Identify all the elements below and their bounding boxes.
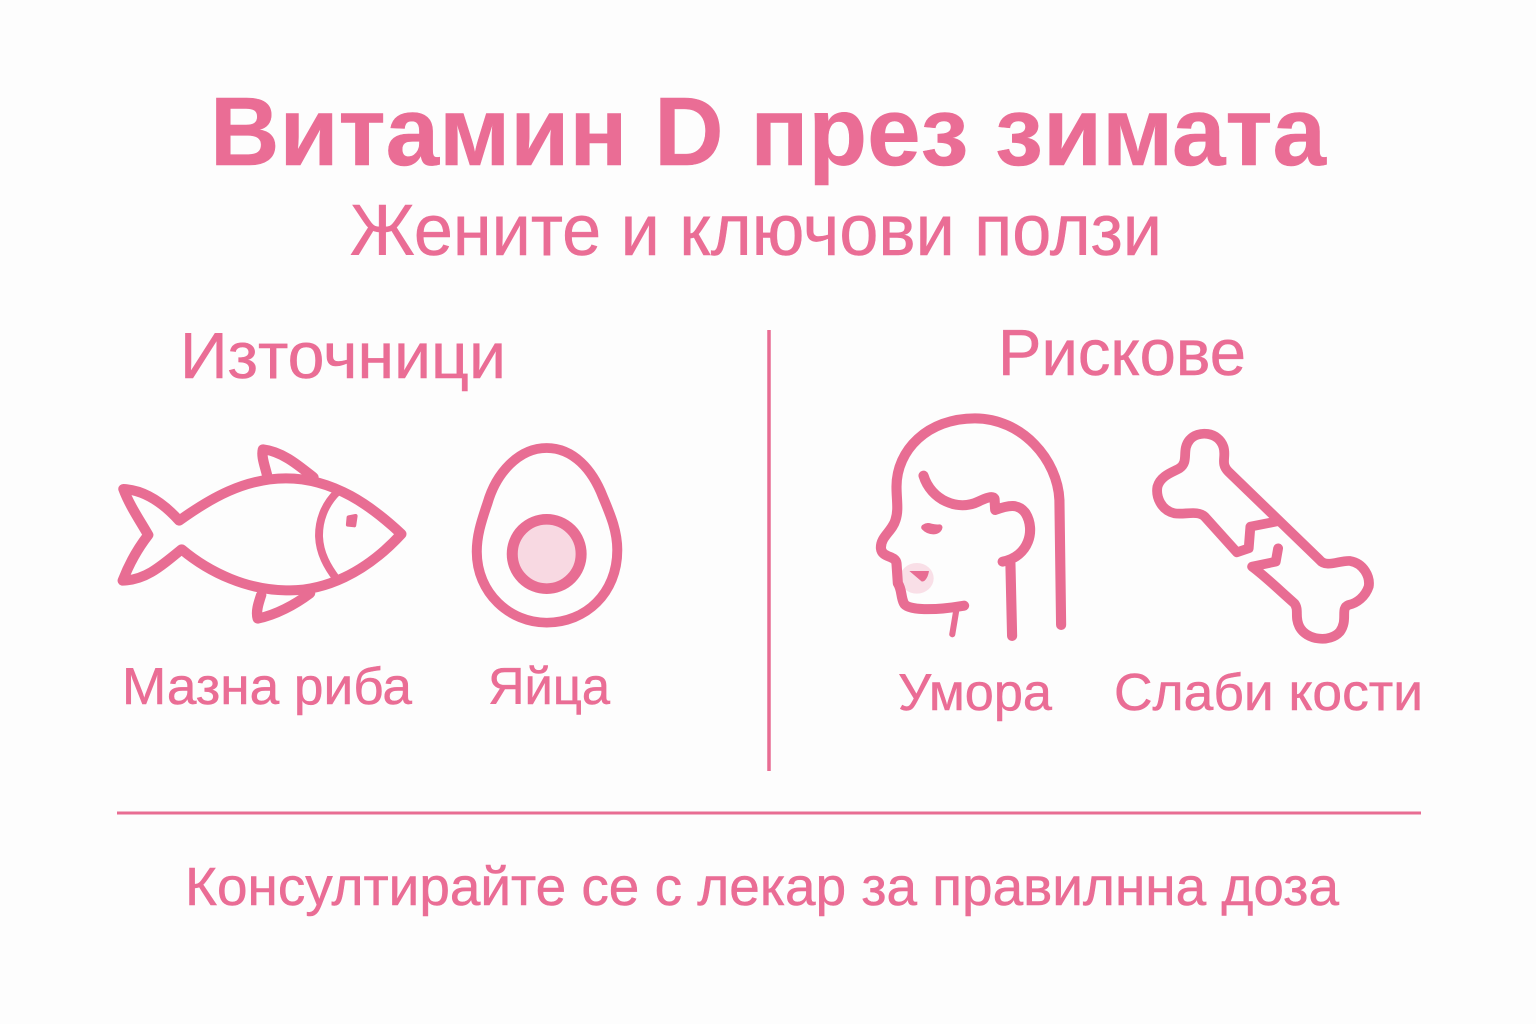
subtitle: Жените и ключови ползи: [350, 191, 1162, 271]
icon: fractured bone: [1157, 434, 1369, 639]
label: weak bones: Слаби кости: [1114, 664, 1423, 722]
footer note: Консултирайте се с лекар за правилнна доза: [185, 857, 1340, 917]
panel: risks: [881, 316, 1423, 722]
heading: sources: Източници: [180, 319, 506, 392]
icon: egg: [477, 448, 617, 623]
label: oily fish: Мазна риба: [122, 658, 412, 716]
heading: risks: Рискове: [998, 316, 1246, 389]
title: Витамин D през зимата: [210, 77, 1327, 186]
horizontal divider: [117, 812, 1421, 814]
label: fatigue: Умора: [898, 664, 1052, 722]
icon: head with fatigue: [881, 418, 1061, 636]
vertical divider: [767, 330, 771, 771]
label: eggs: Яйца: [488, 658, 610, 716]
panel: sources: [122, 319, 617, 716]
icon: fish: [123, 449, 401, 619]
